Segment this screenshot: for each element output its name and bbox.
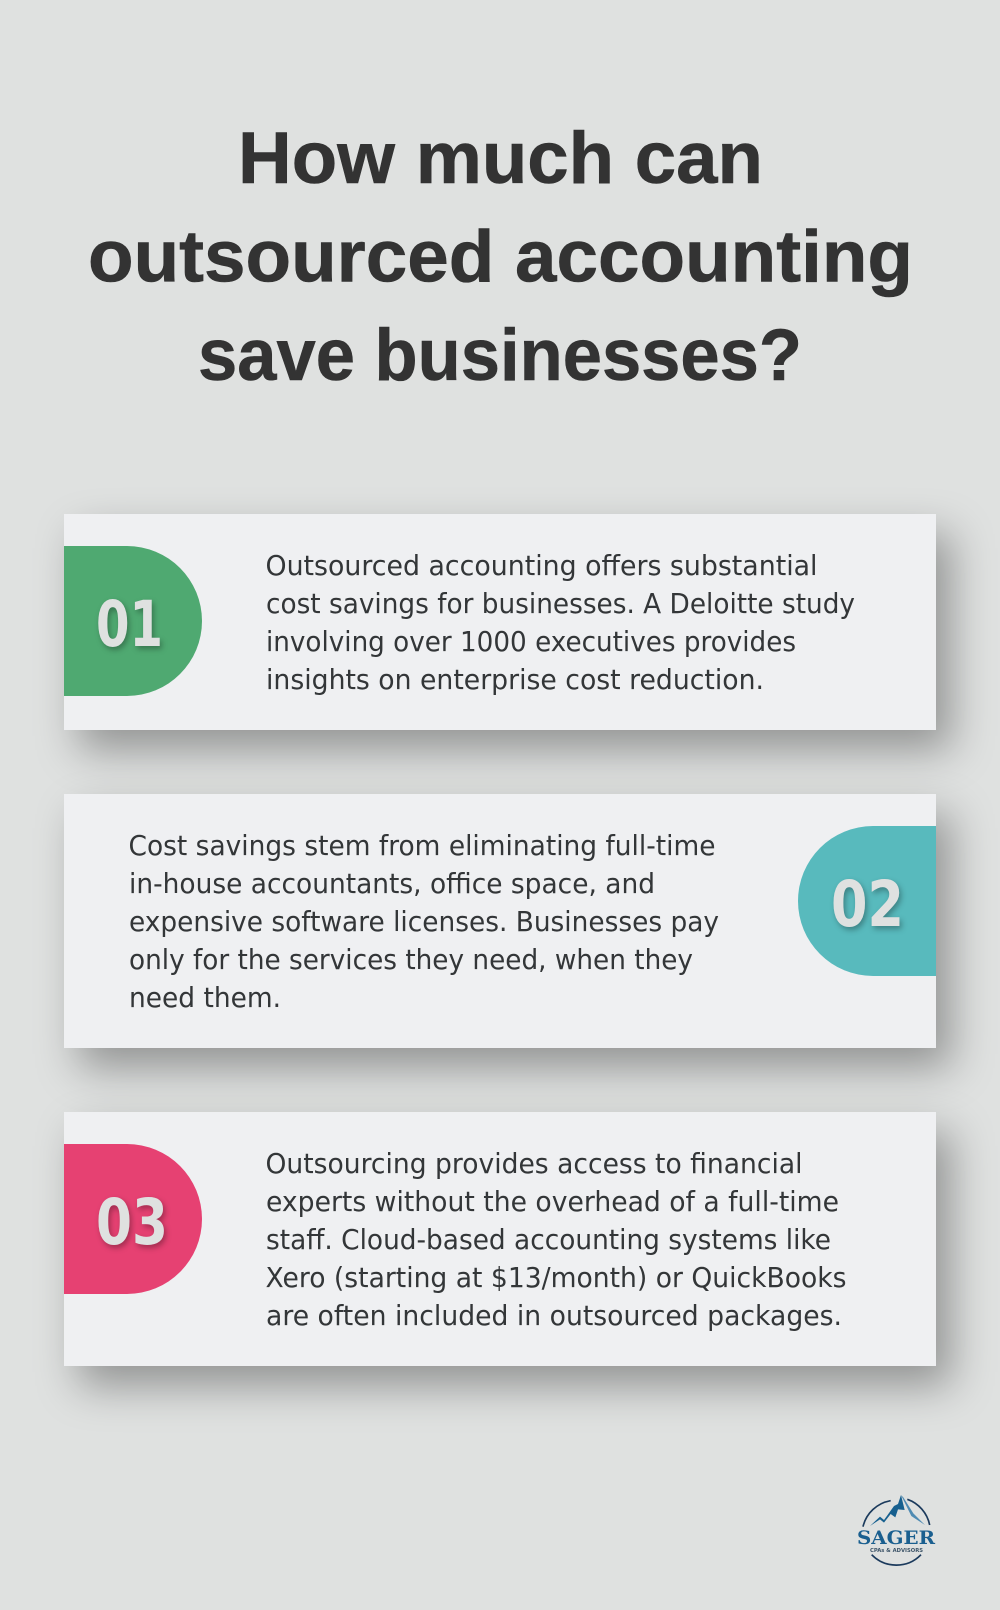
- text block: card 03: are often included in outsourced packages.: [266, 1300, 842, 1332]
- text block: card 03: Xero (starting at $13/month) or QuickBooks: [266, 1262, 846, 1294]
- text: CPAs & ADVISORS: CPAs & ADVISORS: [870, 1548, 923, 1554]
- icon: ring and mountains: [863, 1495, 930, 1565]
- badge: 03: [64, 1144, 202, 1294]
- text block: card 03: Outsourcing provides access to financial: [266, 1148, 802, 1180]
- text block: card 02: expensive software licenses. Businesses pay: [129, 906, 719, 938]
- title: [88, 118, 913, 396]
- text block: card 01: cost savings for businesses. A Deloitte study: [266, 588, 855, 620]
- text block: card 01: [266, 550, 855, 696]
- text block: card 02: need them.: [129, 982, 281, 1014]
- title: save businesses?: [198, 315, 802, 396]
- panel: card 02: [64, 794, 936, 1048]
- text block: card 03: [266, 1148, 846, 1332]
- text block: card 01: Outsourced accounting offers substantial: [266, 550, 818, 582]
- badge: 01: 01: [96, 588, 163, 661]
- badge: 03: 03: [96, 1186, 168, 1259]
- text block: card 02: Cost savings stem from eliminating full-time: [128, 830, 716, 862]
- panel: card 01: [64, 514, 936, 730]
- title: outsourced accounting: [88, 216, 913, 298]
- panel: card 03: [64, 1112, 936, 1366]
- badge: 02: [798, 826, 936, 976]
- badge: 01: [64, 546, 202, 696]
- text block: card 01: involving over 1000 executives provides: [266, 626, 796, 658]
- title: How much can: [238, 118, 763, 199]
- text block: card 03: staff. Cloud-based accounting systems like: [266, 1224, 831, 1256]
- badge: 02: 02: [831, 868, 904, 941]
- text block: card 02: [128, 830, 719, 1014]
- text block: card 01: insights on enterprise cost reduction.: [266, 664, 764, 696]
- text block: card 03: experts without the overhead of a full-time: [266, 1186, 839, 1218]
- text block: card 02: only for the services they need, when they: [129, 944, 693, 976]
- logo: Sager CPAs & Advisors: [857, 1495, 935, 1565]
- text block: card 02: in-house accountants, office space, and: [129, 868, 655, 900]
- text: SAGER: SAGER: [857, 1527, 935, 1549]
